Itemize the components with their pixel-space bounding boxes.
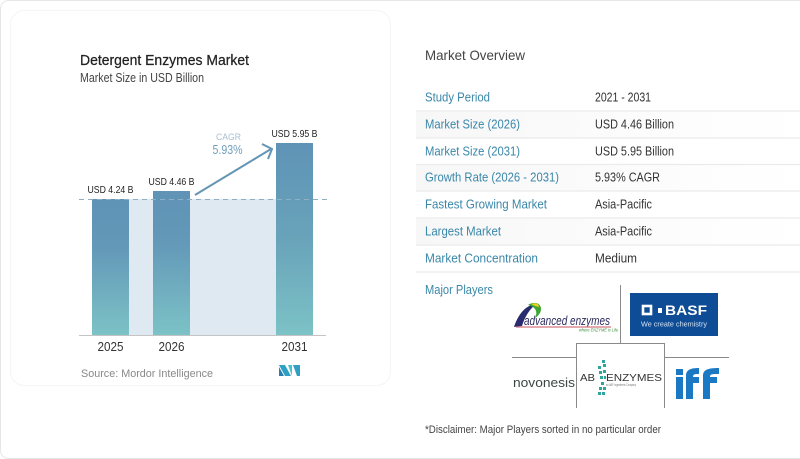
- row: market size 2026: [425, 118, 674, 132]
- panel: market size chart: [10, 10, 390, 386]
- year label 2031: 2031: [282, 339, 308, 354]
- CAGR label: 5.93%: [212, 142, 243, 157]
- row: market size 2031: [425, 144, 674, 158]
- alternating row shading: [416, 112, 800, 245]
- logo: Advanced Enzymes: advanced enzymes: [524, 314, 610, 328]
- row: growth rate: 5.93% CAGR: [595, 170, 660, 184]
- row: largest market: Largest Market: [425, 224, 501, 238]
- chart subtitle: Market Size in USD Billion: [80, 71, 204, 85]
- row: growth rate: [425, 170, 660, 184]
- year label 2025: 2025: [98, 339, 124, 354]
- CAGR label: [212, 132, 243, 157]
- shaded baseline band: [129, 199, 276, 335]
- logo: Novonesis: novonesis: [513, 376, 575, 390]
- row: study period: 2021 - 2031: [595, 90, 651, 104]
- row: market concentration: Medium: [595, 252, 637, 266]
- bar: 2025: [92, 199, 129, 335]
- row: market size 2031: Market Size (2031): [425, 144, 520, 158]
- row: market size 2026: Market Size (2026): [425, 118, 520, 132]
- year label 2026: 2026: [158, 339, 184, 354]
- row: market concentration: Market Concentration: [425, 252, 538, 266]
- logo: AB Enzymes: [580, 360, 662, 395]
- value label 2025: USD 4.24 B: [88, 184, 134, 196]
- row: fastest growing market: Fastest Growing Market: [425, 198, 547, 212]
- major players label: Major Players: [425, 283, 493, 297]
- logo: BASF: BASF: [665, 302, 707, 318]
- logo: IFF: [676, 368, 719, 399]
- logo: AB Enzymes: ENZYMES: [606, 372, 662, 384]
- logo: BASF: [630, 293, 718, 336]
- bar: 2031: [276, 143, 313, 335]
- arrow: CAGR growth: [195, 144, 272, 195]
- value label 2031: USD 5.95 B: [272, 128, 318, 140]
- row: fastest growing market: Asia-Pacific: [595, 198, 652, 212]
- disclaimer: *Disclaimer: Major Players sorted in no particular order: [425, 424, 661, 436]
- row: largest market: [425, 224, 652, 238]
- chart title: Detergent Enzymes Market: [80, 52, 250, 69]
- row: market concentration: [425, 252, 637, 266]
- icon: Mordor Intelligence logo: [279, 365, 300, 376]
- value label 2026: USD 4.46 B: [148, 176, 194, 188]
- logo: BASF: We create chemistry: [641, 322, 708, 328]
- row: largest market: Asia-Pacific: [595, 224, 652, 238]
- panel: market overview: [416, 47, 800, 297]
- logo: AB Enzymes: AB: [580, 372, 595, 384]
- logo: AB Enzymes: an ABF Ingredients Company: [606, 383, 636, 387]
- row: study period: Study Period: [425, 90, 490, 104]
- major players logo grid: [512, 285, 729, 408]
- overview heading: Market Overview: [425, 47, 526, 63]
- CAGR label: CAGR: [216, 132, 241, 143]
- logo: Advanced Enzymes: where ENZYME is Life: [579, 328, 618, 332]
- bar: 2026: [153, 191, 190, 335]
- row: growth rate: Growth Rate (2026 - 2031): [425, 170, 559, 184]
- bar chart: [79, 128, 327, 354]
- row: fastest growing market: [425, 198, 652, 212]
- row: market size 2031: USD 5.95 Billion: [595, 144, 674, 158]
- logo: Advanced Enzymes: [514, 303, 618, 332]
- row: study period: [425, 90, 651, 104]
- source note: Source: Mordor Intelligence: [81, 368, 213, 380]
- row: market size 2026: USD 4.46 Billion: [595, 118, 674, 132]
